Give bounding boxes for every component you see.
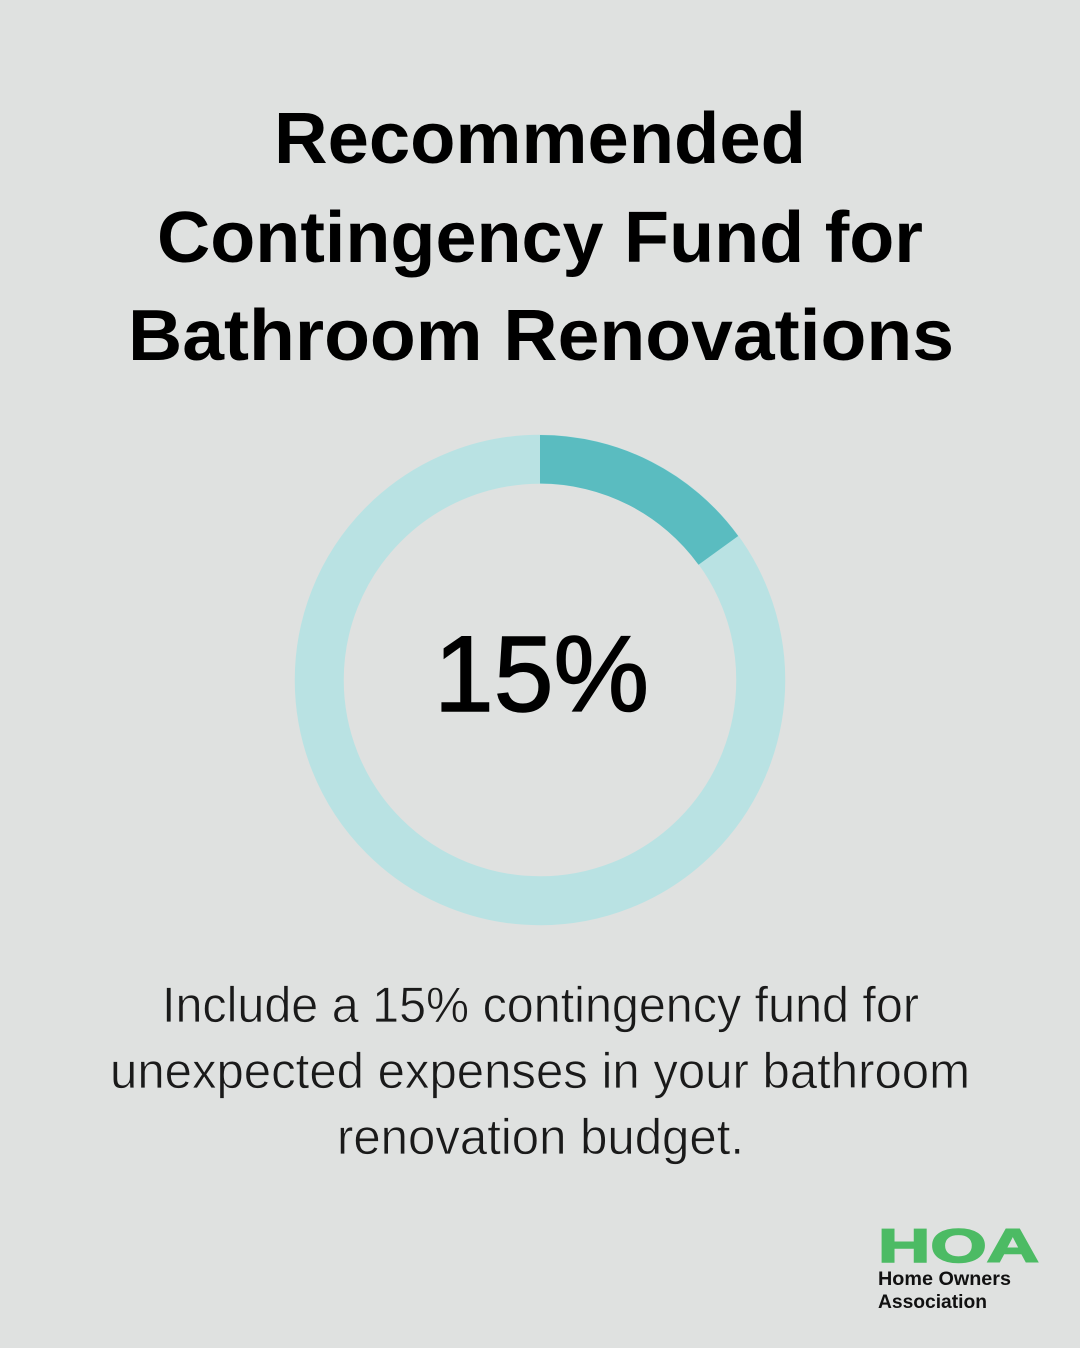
title: Contingency Fund for [157,198,923,278]
description text: unexpected expenses in your bathroom [110,1043,970,1099]
description text [110,977,970,1165]
logo name: Association [878,1291,987,1313]
donut chart: 15% [319,435,761,901]
logo name: Home Owners [878,1268,1011,1290]
logo mark: HOA [878,1219,1039,1272]
logo name [878,1268,1011,1313]
description text: Include a 15% contingency fund for [162,977,919,1033]
title: Recommended [274,99,806,179]
donut highlighted segment [540,435,738,565]
description text: renovation budget. [337,1109,744,1165]
logo: Home Owners Association [878,1219,1039,1313]
donut track [319,459,761,901]
donut value: 15% [434,613,649,734]
title: Bathroom Renovations [128,296,954,376]
title [128,99,954,376]
